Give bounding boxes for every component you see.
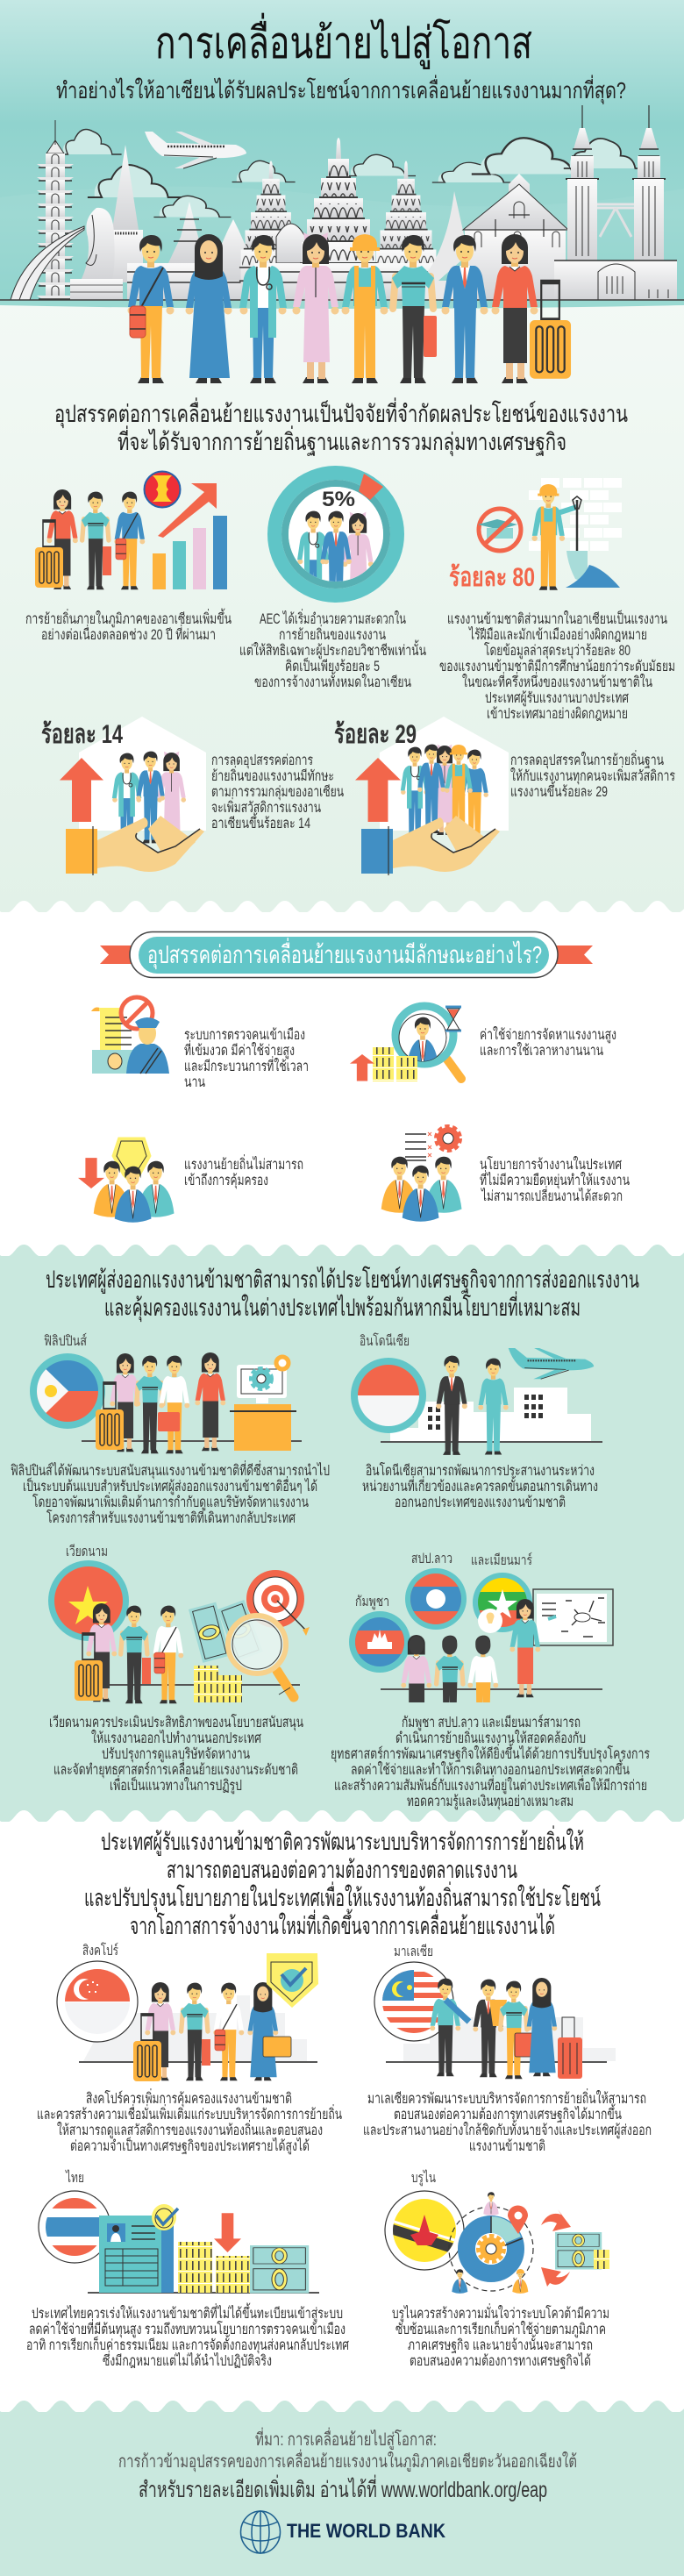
text: Singapore: และควรสร้างความเชื่อมั่นเพิ่มเติมแก่ระบบบริหารจัดการการย้ายถิ่น	[37, 2104, 342, 2123]
chart: five percent donut	[274, 473, 397, 613]
text: high recruitment costs: และการใช้เวลาหางานนาน	[480, 1042, 603, 1059]
callout: 29 percent welfare gain	[334, 717, 675, 875]
text: strict immigration systems: และมีกระบวนการที่ใช้เวลา	[184, 1056, 309, 1074]
illustration: Singapore	[57, 1953, 318, 2081]
label: Brunei: บรูไน	[411, 2169, 436, 2187]
illustration: Indonesia	[351, 1348, 602, 1455]
text: strict immigration systems: ที่เข้มงวด มีค่าใช้จ่ายสูง	[184, 1040, 295, 1060]
text: Malaysia: แรงงานข้ามชาติ	[469, 2138, 545, 2154]
text block: regional migration growth	[25, 608, 232, 643]
panel: what barriers look like	[78, 931, 630, 1223]
text: Singapore	[37, 2088, 342, 2155]
label: Singapore: สิงคโปร์	[82, 1942, 118, 1959]
text: Indonesia	[362, 1462, 598, 1510]
callout: 14 percent welfare gain	[41, 717, 344, 875]
text: Vietnam: และจัดทำยุทธศาสตร์การเคลื่อนย้ายแรงงานระดับชาติ	[53, 1759, 298, 1779]
text: Philippines	[11, 1460, 330, 1526]
text: strict immigration systems	[184, 1027, 309, 1090]
text block: regional migration growth: การย้ายถิ่นภายในภูมิภาคของอาเซียนเพิ่มขึ้น	[25, 608, 232, 628]
text block: regional migration growth: อย่างต่อเนื่องตลอดช่วง 20 ปี ที่ผ่านมา	[41, 624, 216, 643]
text: Vietnam: เพื่อเป็นแนวทางในการปฏิรูป	[110, 1775, 242, 1795]
text: Thailand: อาทิ การเรียกเก็บค่าธรรมเนียม และการจัดตั้งกองทุนส่งคนกลับประเทศ	[26, 2334, 349, 2354]
text block: AEC five percent: ของการจ้างงานทั้งหมดในอาเซียน	[254, 671, 411, 690]
text: strict immigration systems: ระบบการตรวจคนเข้าเมือง	[184, 1027, 305, 1043]
text: Brunei: ซับซ้อนและการเรียกเก็บค่าใช้จ่ายตามภูมิภาค	[395, 2320, 606, 2338]
text: cannot access protection: แรงงานย้ายถิ่นไม่สามารถ	[184, 1154, 303, 1173]
text: cannot access protection: เข้าถึงการคุ้มครอง	[184, 1173, 268, 1189]
text: Singapore: สิงคโปร์ควรเพิ่มการคุ้มครองแรงงานข้ามชาติ	[86, 2088, 292, 2108]
text: Vietnam: ปรับปรุงการดูแลบริษัทจัดหางาน	[102, 1746, 250, 1763]
text: Cambodia, Lao PDR and Myanmar	[331, 1714, 650, 1810]
heading	[54, 397, 628, 457]
labels: Cambodia, Lao PDR, Myanmar: และเมียนมาร์	[471, 1552, 532, 1568]
text block: AEC five percent: การย้ายถิ่นของแรงงาน	[279, 624, 386, 643]
illustration: Philippines	[30, 1352, 302, 1453]
illustration: eight migrant workers	[128, 232, 571, 383]
text: Philippines: ฟิลิปปินส์ได้พัฒนาระบบสนับสนุนแรงงานข้ามชาติที่ดีซึ่งสามารถนำไป	[11, 1460, 330, 1480]
text block: AEC five percent	[239, 609, 426, 690]
text: inflexible policy: นโยบายการจ้างงานในประเทศ	[480, 1156, 622, 1173]
labels: Cambodia, Lao PDR, Myanmar: สปป.ลาว	[411, 1552, 452, 1566]
label: Malaysia: มาเลเซีย	[394, 1944, 433, 1959]
label: Indonesia: อินโดนีเซีย	[360, 1332, 410, 1349]
chart: five percent donut: 5%	[322, 488, 355, 511]
callout: 29 percent welfare gain: แรงงานขึ้นร้อยละ 29	[510, 781, 608, 800]
panel: sending countries	[11, 1266, 650, 1810]
illustration: Cambodia, Lao PDR and Myanmar	[349, 1568, 614, 1702]
heading	[46, 1266, 639, 1323]
text: Vietnam	[49, 1714, 303, 1795]
text: Brunei: ตอบสนองความต้องการทางเศรษฐกิจได้	[410, 2352, 591, 2369]
illustration: Thailand	[39, 2191, 319, 2294]
logo: The World Bank: THE WORLD BANK	[287, 2520, 445, 2542]
text block: AEC five percent: AEC ได้เริ่มอำนวยความสะดวกใน	[260, 609, 406, 627]
callout: 14 percent welfare gain: จะเพิ่มสวัสดิการแรงงาน	[211, 797, 321, 816]
text: strict immigration systems: นาน	[184, 1074, 205, 1090]
illustration: migration growth bar chart	[35, 472, 227, 589]
title: การเคลื่อนย้ายไปสู่โอกาส	[155, 13, 532, 69]
text: Cambodia, Lao PDR and Myanmar: ดำเนินการย้ายถิ่นแรงงานให้สอดคล้องกับ	[395, 1728, 586, 1746]
text: Thailand: ลดค่าใช้จ่ายที่มีต้นทุนสูง รวมถึงทบทวนนโยบายการตรวจคนเข้าเมือง	[29, 2319, 346, 2338]
text: Philippines: โดยอาจพัฒนาเพิ่มเติมด้านการกำกับดูแลบริษัทจัดหาแรงงาน	[32, 1492, 309, 1511]
text: Cambodia, Lao PDR and Myanmar: กัมพูชา สปป.ลาว และเมียนมาร์สามารถ	[402, 1714, 581, 1731]
icon: lack of protection	[78, 1138, 174, 1223]
illustration: airplane	[145, 132, 246, 168]
text: cannot access protection	[184, 1154, 303, 1189]
text: inflexible policy: ที่ไม่มีความยืดหยุ่นทำให้แรงงาน	[480, 1170, 630, 1189]
text: Brunei: บรูไนควรสร้างความมั่นใจว่าระบบโควต้ามีความ	[392, 2303, 609, 2323]
text: Philippines: เป็นระบบต้นแบบสำหรับประเทศผู้ส่งออกแรงงานข้ามชาติอื่นๆ ได้	[23, 1476, 317, 1495]
label: Thailand: ไทย	[64, 2169, 84, 2186]
text block: unskilled irregular workers: ประเทศผู้รับแรงงานบางประเทศ	[485, 690, 629, 707]
heading	[84, 1825, 601, 1939]
panel: hero	[0, 13, 684, 383]
text block: unskilled irregular workers: เข้าประเทศมาอย่างผิดกฎหมาย	[487, 706, 628, 722]
callout: 14 percent welfare gain: อาเซียนขึ้นร้อยละ 14	[211, 812, 310, 831]
banner heading	[100, 931, 593, 977]
source text: ที่มา: การเคลื่อนย้ายไปสู่โอกาส:	[255, 2427, 437, 2451]
illustration: unskilled worker 80 percent	[449, 478, 622, 592]
callout: 14 percent welfare gain: ตามการรวมกลุ่มของอาเซียน	[211, 784, 344, 801]
banner heading: อุปสรรคต่อการเคลื่อนย้ายแรงงานมีลักษณะอย่างไร?	[147, 938, 542, 970]
label: Philippines: ฟิลิปปินส์	[44, 1332, 87, 1349]
icon: recruitment cost magnifier	[350, 1006, 461, 1081]
icon: immigration officer	[91, 997, 169, 1074]
text: Indonesia: อินโดนีเซียสามารถพัฒนาการประสานงานระหว่าง	[366, 1462, 595, 1479]
text: Indonesia: หน่วยงานที่เกี่ยวข้องและควรลดขั้นตอนการเดินทาง	[362, 1475, 598, 1495]
text: Vietnam: ให้แรงงานออกไปทำงานนอกประเทศ	[91, 1730, 261, 1746]
text block: AEC five percent: แต่ให้สิทธิเฉพาะผู้ประกอบวิชาชีพเท่านั้น	[239, 639, 426, 660]
labels: Cambodia, Lao PDR, Myanmar	[355, 1552, 532, 1610]
text: Cambodia, Lao PDR and Myanmar: ทอดความรู้และเงินทุนอย่างเหมาะสม	[407, 1794, 574, 1810]
text: Singapore: ให้สามารถดูแลสวัสดิการของแรงงานท้องถิ่นและตอบสนอง	[57, 2120, 323, 2139]
logo: The World Bank	[240, 2511, 445, 2553]
source text	[118, 2427, 577, 2473]
illustration: unskilled worker 80 percent: ร้อยละ 80	[449, 563, 535, 592]
text: Philippines: โครงการสำหรับแรงงานข้ามชาติที่เดินทางกลับประเทศ	[46, 1508, 296, 1526]
illustration: Vietnam	[48, 1560, 310, 1703]
callout: 29 percent welfare gain: ร้อยละ 29	[334, 720, 417, 749]
callout: 14 percent welfare gain: การลดอุปสรรคต่อการ	[211, 753, 313, 769]
text: inflexible policy: ไม่สามารถเปลี่ยนงานได้สะดวก	[481, 1186, 623, 1204]
labels: Cambodia, Lao PDR, Myanmar: กัมพูชา	[355, 1595, 389, 1610]
text block: unskilled irregular workers: โดยข้อมูลล่าสุดระบุว่าร้อยละ 80	[484, 642, 631, 660]
text: Vietnam: เวียดนามควรประเมินประสิทธิภาพของนโยบายสนับสนุน	[49, 1714, 303, 1731]
illustration: Brunei	[385, 2191, 609, 2294]
text: Brunei	[392, 2303, 609, 2369]
panel: receiving countries	[26, 1825, 652, 2369]
text block: unskilled irregular workers	[439, 610, 675, 722]
text: inflexible policy	[480, 1156, 630, 1204]
panel: barriers limit benefits	[25, 397, 675, 875]
text: Thailand: ซึ่งมีกฎหมายแต่ไม่ได้นำไปปฏิบัติจริง	[103, 2351, 272, 2369]
callout: 14 percent welfare gain: ร้อยละ 14	[41, 720, 123, 749]
text: high recruitment costs: ค่าใช้จ่ายการจัดหาแรงงานสูง	[480, 1026, 616, 1044]
text: Malaysia	[363, 2088, 652, 2154]
text: Thailand	[26, 2302, 349, 2369]
panel: footer	[118, 2427, 577, 2553]
text: Brunei: ภาคเศรษฐกิจ และนายจ้างนั้นจะสามารถ	[408, 2334, 593, 2353]
callout: 14 percent welfare gain: ย้ายถิ่นของแรงงานมีทักษะ	[211, 766, 334, 784]
icon: inflexible employment policy	[381, 1127, 461, 1222]
text: Indonesia: ออกนอกประเทศของแรงงานข้ามชาติ	[395, 1495, 566, 1510]
text: Thailand: ประเทศไทยควรเร่งให้แรงงานข้ามชาติที่ไม่ได้ขึ้นทะเบียนเข้าสู่ระบบ	[32, 2302, 343, 2323]
text: high recruitment costs	[480, 1026, 616, 1059]
label: Vietnam: เวียดนาม	[66, 1544, 108, 1559]
text block: AEC five percent: คิดเป็นเพียงร้อยละ 5	[285, 657, 380, 674]
illustration: Malaysia	[374, 1962, 616, 2079]
text: Singapore: ต่อความจำเป็นทางเศรษฐกิจของประเทศรายได้สูงได้	[70, 2137, 310, 2155]
illustration: skyline	[0, 105, 684, 301]
